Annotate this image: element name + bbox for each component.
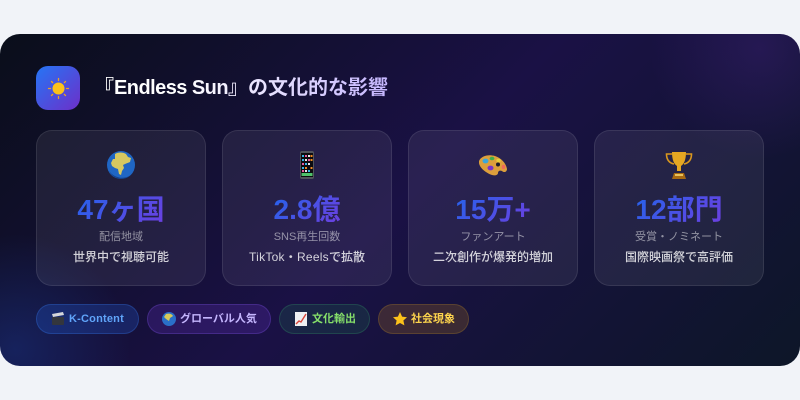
stat description: 二次創作が爆発的増加 — [433, 250, 553, 264]
icon: clapperboard — [52, 312, 64, 325]
stat description: 世界中で視聴可能 — [73, 250, 169, 264]
icon: phone — [300, 151, 314, 179]
icon: globe — [162, 312, 176, 326]
panel: stat card 3 — [408, 130, 578, 286]
stat label: 受賞・ノミネート — [635, 231, 723, 243]
icon: trophy — [666, 152, 692, 179]
icon: sun — [36, 66, 80, 110]
icon: star — [393, 312, 407, 326]
icon: globe — [107, 151, 135, 179]
tag: cultural export: 文化輸出 — [312, 313, 356, 325]
tag: K-Content: K-Content — [69, 313, 124, 325]
stat value: 15万+ — [455, 194, 531, 225]
panel: stat card 4 — [594, 130, 764, 286]
stat label: SNS再生回数 — [274, 231, 340, 243]
tag: global popularity — [147, 304, 271, 334]
tag: K-Content — [36, 304, 139, 334]
tag: social phenomenon: 社会現象 — [411, 313, 455, 325]
panel: stat card 2 — [222, 130, 392, 286]
stat label: 配信地域 — [99, 231, 143, 243]
panel: stat card 1 — [36, 130, 206, 286]
title: 『Endless Sun』の文化的な影響 — [94, 77, 388, 99]
stat value: 12部門 — [635, 194, 723, 225]
stat label: ファンアート — [460, 231, 526, 243]
stat description: 国際映画祭で高評価 — [625, 250, 733, 264]
icon: palette — [479, 155, 507, 176]
icon: chart — [295, 312, 307, 326]
tag: social phenomenon — [378, 304, 469, 334]
tag: cultural export — [279, 304, 370, 334]
stat value: 47ヶ国 — [77, 194, 165, 225]
stat value: 2.8億 — [274, 194, 340, 225]
stat description: TikTok・Reelsで拡散 — [249, 250, 365, 264]
tag: global popularity: グローバル人気 — [180, 313, 257, 325]
